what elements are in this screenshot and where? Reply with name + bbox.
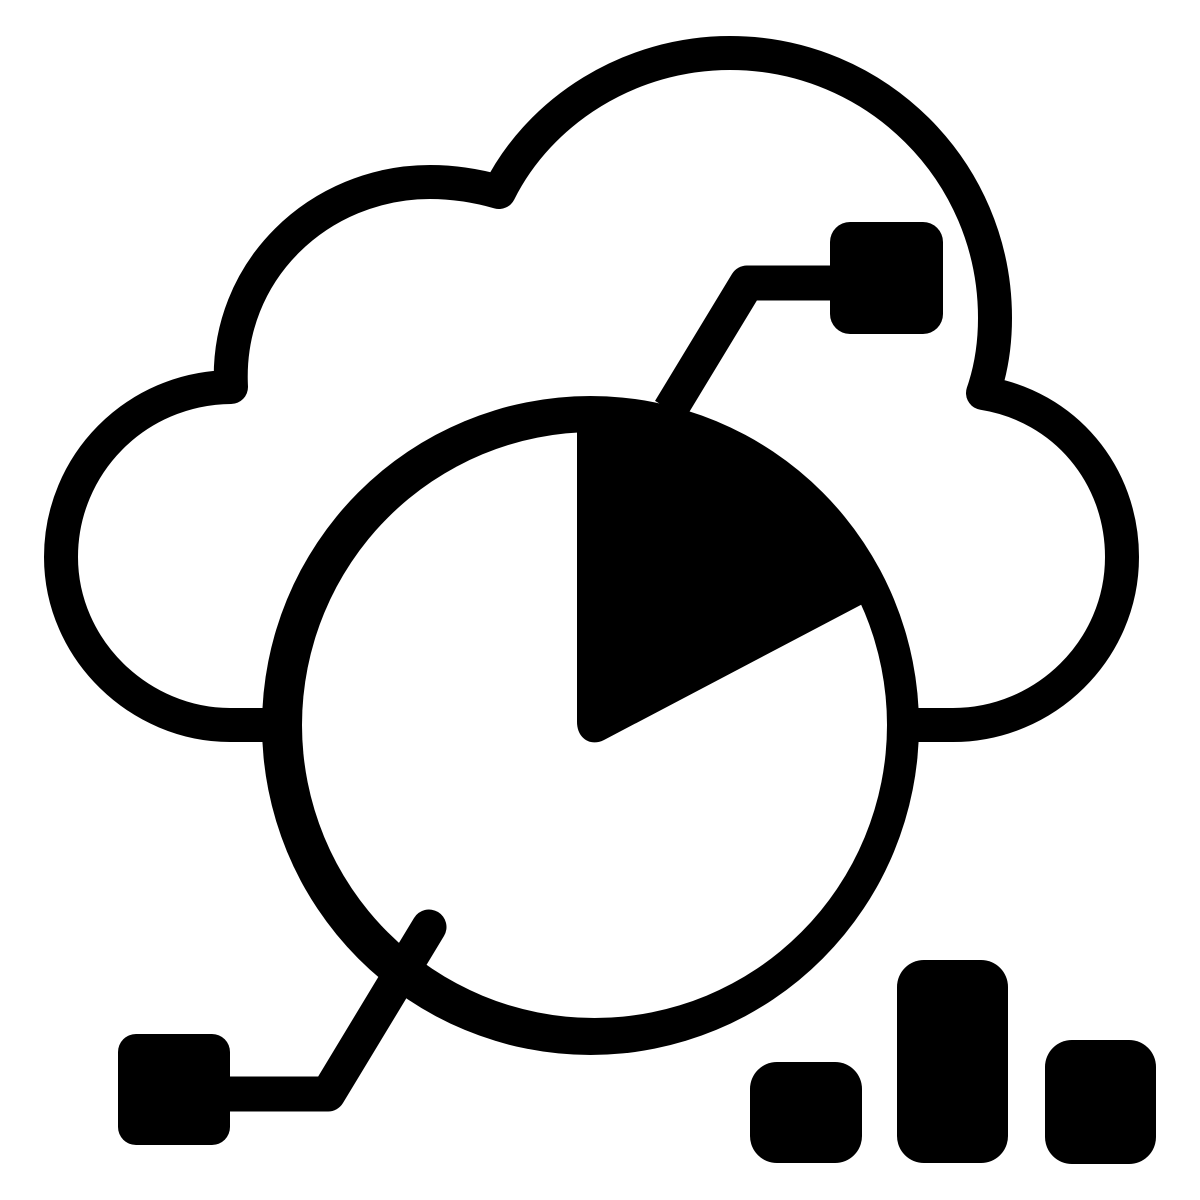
- bar chart: [750, 960, 1156, 1164]
- bar: medium: [1045, 1040, 1156, 1164]
- bar: short: [750, 1062, 862, 1163]
- bar: tall: [897, 960, 1008, 1163]
- pie chart highlighted slice: [577, 412, 874, 742]
- icon: lower connector line with node: [118, 927, 429, 1145]
- icon: cloud outline: [61, 53, 1122, 725]
- pie chart circle: [262, 396, 919, 1055]
- icon: upper connector line with node: [670, 222, 943, 410]
